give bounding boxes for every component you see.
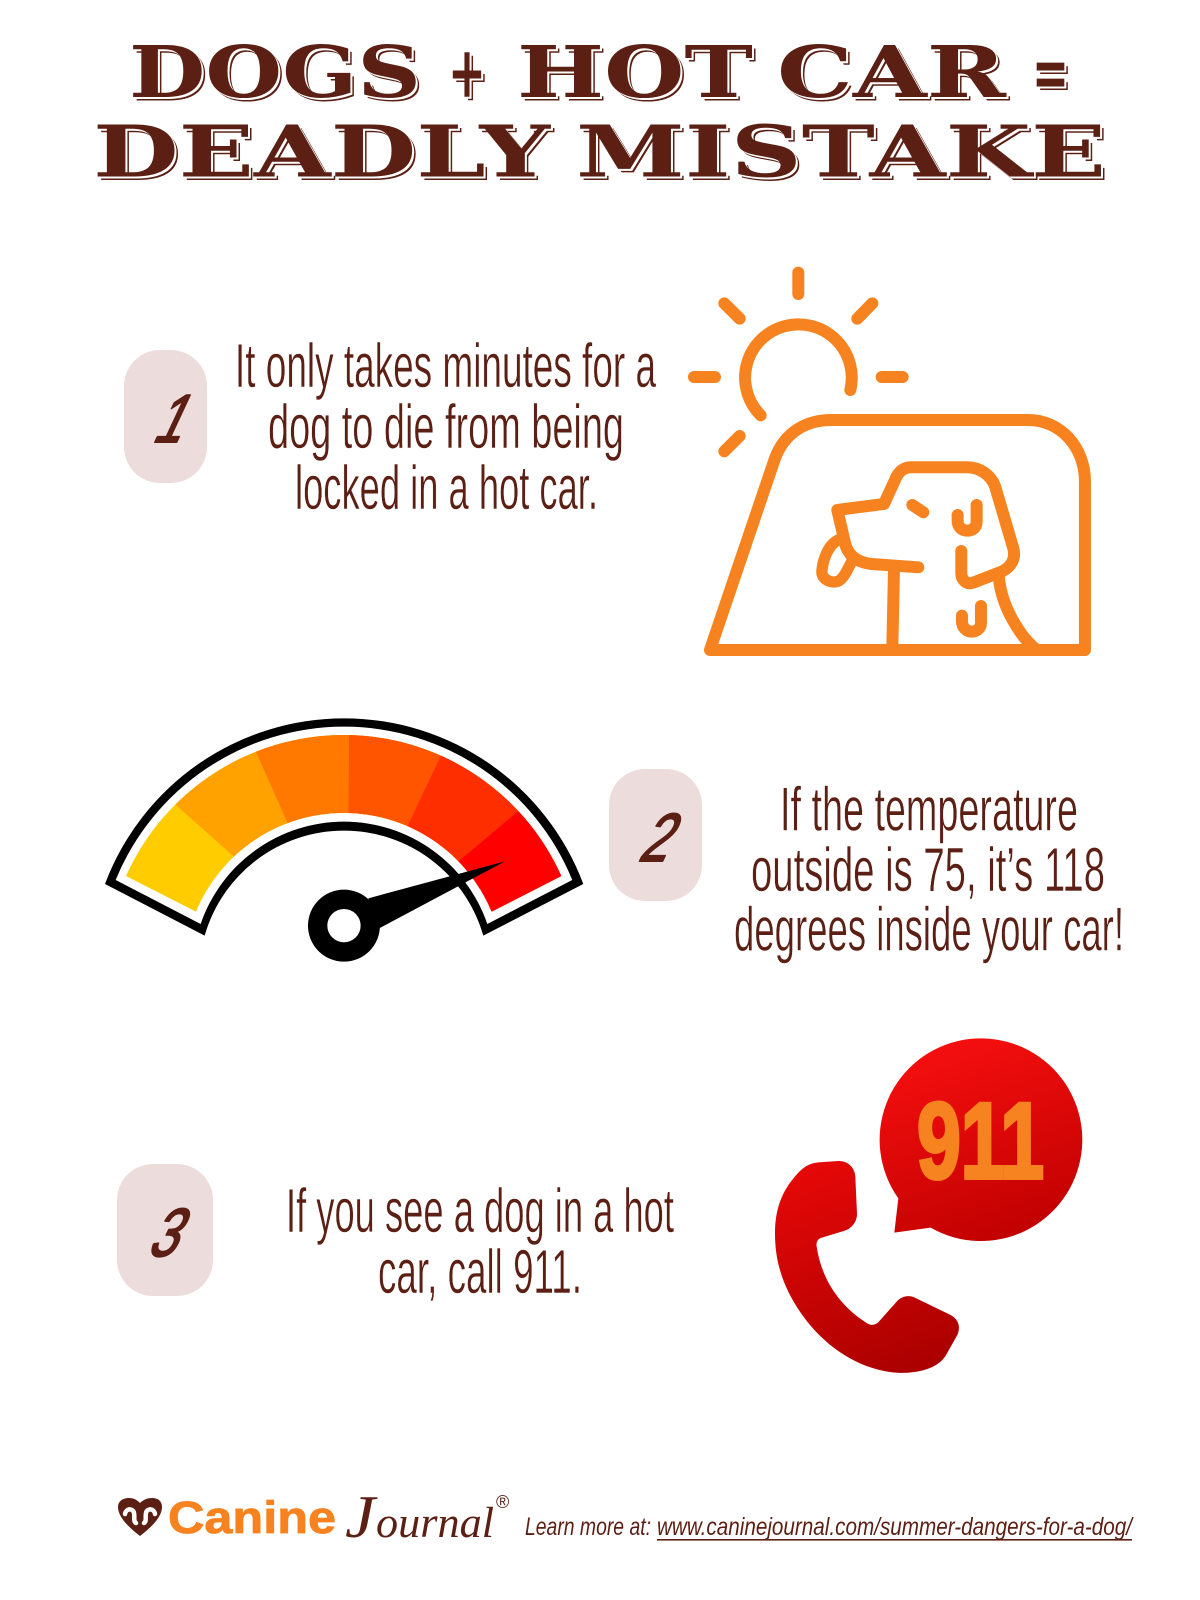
chart: temperature gauge	[105, 718, 584, 962]
title: DEADLY	[95, 112, 554, 196]
logo: Canine Journal	[118, 1484, 509, 1550]
logo: Canine Journal: ®	[496, 1492, 509, 1512]
title: =	[1036, 34, 1072, 118]
text: step 1	[235, 332, 656, 523]
icon: sun over dog in car	[694, 273, 1085, 650]
title: CAR	[780, 34, 1011, 118]
text: step 2	[734, 776, 1124, 964]
logo: Canine Journal: Canine	[168, 1492, 336, 1543]
number badge 1: 1	[144, 381, 208, 457]
text: step 1: It only takes minutes for a	[235, 332, 656, 401]
number badge 2: 2	[630, 800, 694, 876]
title: DOGS	[132, 34, 424, 118]
text: step 3: car, call 911.	[378, 1238, 582, 1307]
title: MISTAKE	[576, 110, 1106, 194]
icon: phone with 911 speech bubble	[775, 1038, 1082, 1373]
text: step 1: dog to die from being	[268, 393, 624, 462]
title: HOT	[517, 30, 753, 114]
panel: step 1	[124, 273, 1085, 650]
number badge 3: 3	[139, 1195, 203, 1271]
text: step 3: If you see a dog in a hot	[286, 1177, 674, 1246]
title: CAR	[777, 30, 1007, 114]
icon: dog heart logo	[118, 1498, 162, 1536]
title: =	[1032, 30, 1069, 114]
panel: step 2	[90, 700, 1124, 967]
logo: Canine Journal: J	[345, 1484, 378, 1550]
title	[93, 30, 1110, 197]
text: learn more link: Learn more at:	[525, 1513, 651, 1541]
icon: phone with 911 speech bubble: 911	[917, 1080, 1044, 1201]
title: HOT	[519, 32, 755, 116]
title: +	[448, 30, 486, 114]
text: step 1: locked in a hot car.	[295, 454, 598, 523]
title: =	[1034, 32, 1071, 116]
title: CAR	[779, 32, 1009, 116]
title: HOT	[520, 34, 757, 118]
title: DOGS	[129, 30, 421, 114]
title: DEADLY	[93, 110, 552, 194]
number badge 3	[117, 1164, 213, 1296]
title: MISTAKE	[580, 113, 1110, 197]
number badge 2	[609, 769, 702, 901]
title: +	[452, 34, 490, 118]
footer	[118, 1484, 1135, 1550]
title: DOGS	[131, 32, 423, 116]
logo: Canine Journal: ournal	[376, 1500, 494, 1547]
number badge 1	[124, 350, 208, 483]
panel: step 3	[117, 1038, 1082, 1373]
title: +	[450, 32, 488, 116]
title: MISTAKE	[578, 112, 1108, 196]
title: DEADLY	[96, 113, 555, 197]
text: step 3	[286, 1177, 674, 1307]
